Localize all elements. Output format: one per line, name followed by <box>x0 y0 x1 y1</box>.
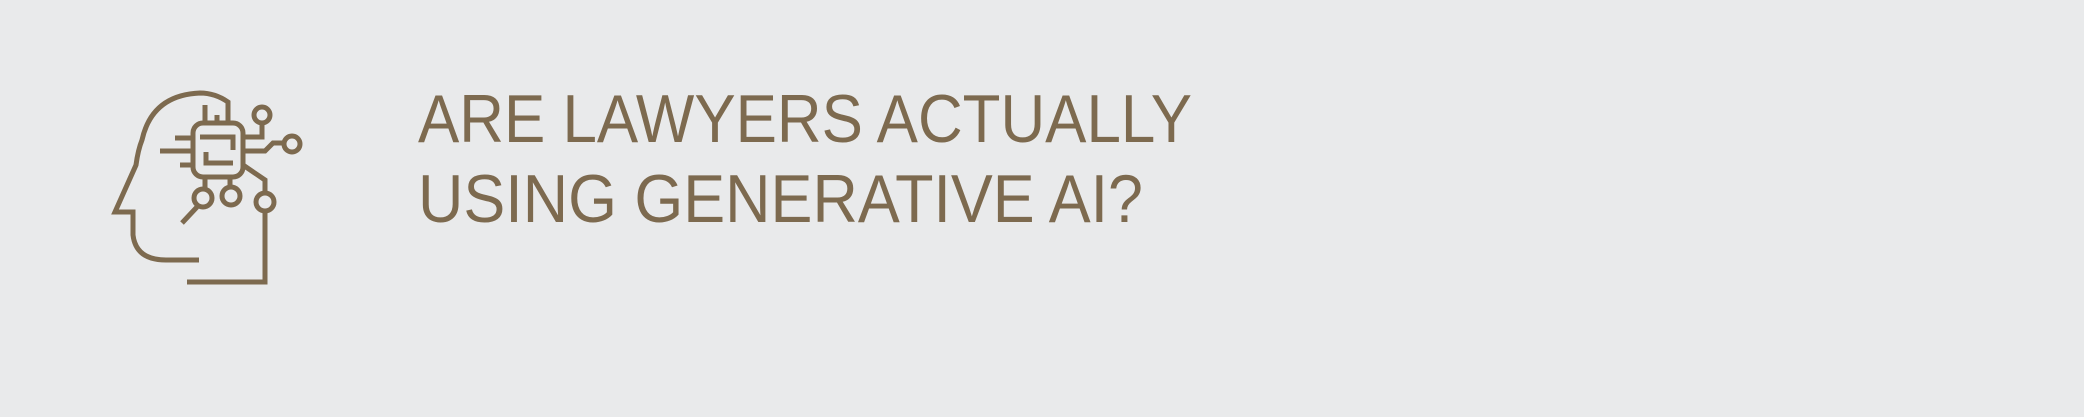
title: USING GENERATIVE AI? <box>418 161 1143 237</box>
icon: head with AI chip <box>115 93 300 282</box>
title: ARE LAWYERS ACTUALLY <box>418 81 1192 157</box>
title <box>418 81 1192 237</box>
